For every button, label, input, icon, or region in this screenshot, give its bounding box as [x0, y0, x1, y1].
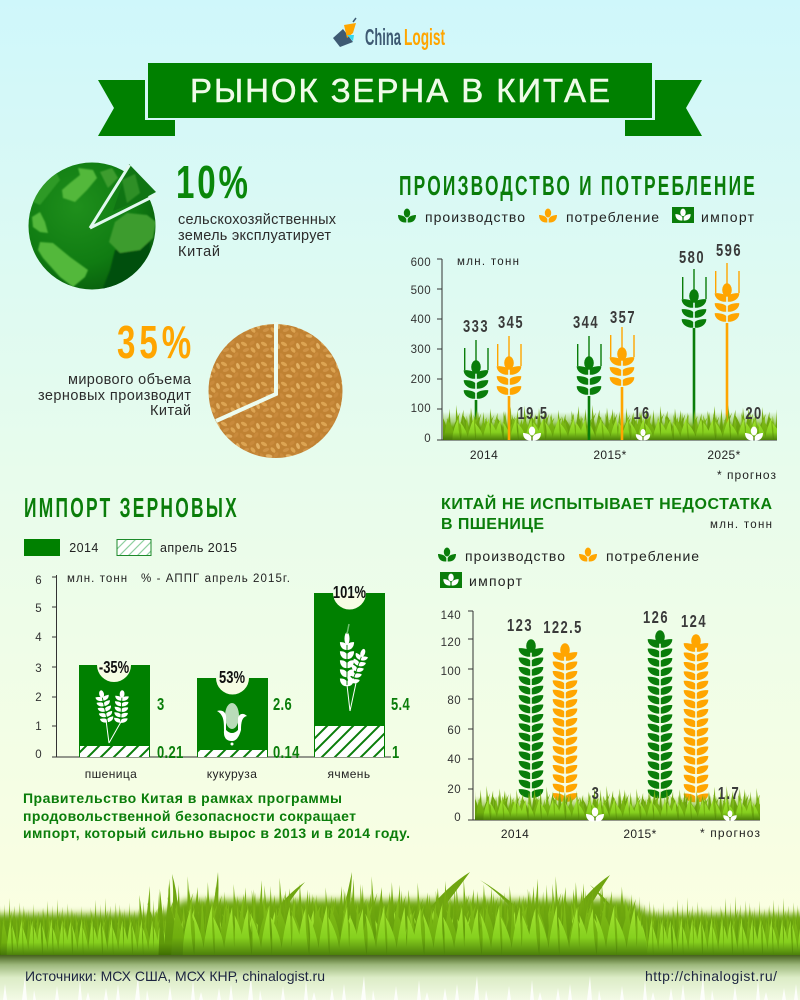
- text: 35% description: зерновых производит: [38, 388, 191, 404]
- import icons: [586, 808, 737, 822]
- chart 1 values: 344: [573, 313, 599, 333]
- text: 10% description: [178, 212, 337, 260]
- chart 1 axis: млн. тонн: [457, 256, 519, 268]
- wheat: 2015 consumption 124: [684, 634, 708, 802]
- chart 2 axis: 5: [35, 603, 42, 615]
- panel: 10% land: [28, 158, 337, 295]
- heading: China wheat: В ПШЕНИЦЕ: [441, 516, 544, 533]
- legend: production chart: [398, 207, 755, 225]
- icon: barley: [340, 624, 370, 711]
- chart 1 values: 580: [679, 248, 705, 268]
- chart 1 axis: 100: [411, 403, 431, 415]
- wheat: 2025 consumption 596: [715, 263, 740, 430]
- chart 1 x labels: 2025*: [707, 448, 741, 462]
- legend: production chart: производство: [425, 209, 525, 225]
- bar: barley: 1: [392, 743, 400, 763]
- chart 1 x labels: 2015*: [593, 448, 627, 462]
- chart 3 values: 122.5: [543, 618, 583, 638]
- logo: China Logist: Logist: [404, 24, 445, 50]
- chart 2 axis: млн. тонн % - АППГ апрель 2015г.: [67, 573, 290, 585]
- heading: China wheat: КИТАЙ НЕ ИСПЫТЫВАЕТ НЕДОСТАТКА: [441, 494, 772, 513]
- chart 3 x labels: * прогноз: [700, 826, 760, 840]
- chart 1 values: 16: [633, 404, 651, 424]
- legend: production chart: импорт: [701, 209, 755, 225]
- chart 3 x labels: 2014: [501, 827, 529, 841]
- text block: government note: Правительство Китая в рамках программы: [23, 790, 342, 806]
- unit label: млн. тонн: [710, 519, 772, 531]
- chart 1 axis: 200: [411, 374, 431, 386]
- legend: wheat chart: импорт: [469, 573, 523, 589]
- chart 1 values: 333: [463, 317, 489, 337]
- icon: corn: [217, 703, 247, 746]
- bar: barley: 101%: [333, 583, 366, 603]
- chart 3 values: 1.7: [718, 784, 740, 804]
- icon: wheat: [94, 689, 129, 743]
- title banner: РЫНОК ЗЕРНА В КИТАЕ: [190, 72, 610, 109]
- text block: government note: импорт, который сильно вырос в 2013 и в 2014 году.: [23, 825, 410, 841]
- legend: imports chart: [24, 539, 237, 556]
- chart 2 axis: [35, 573, 391, 761]
- chart 1 x labels: 2014: [470, 448, 498, 462]
- text block: government note: продовольственной безопасности сокращает: [23, 808, 356, 824]
- chart 1 values: 19.5: [518, 404, 548, 424]
- chart 3 x labels: 2015*: [623, 827, 657, 841]
- chart 2 axis: 2: [35, 692, 42, 704]
- chart 1 axis: 600: [411, 257, 431, 269]
- footer sources: Источники: МСХ США, МСХ КНР, chinalogist.ru: [25, 968, 325, 984]
- stat: 10%: 10%: [176, 158, 248, 208]
- icon: grain pie: [208, 322, 342, 458]
- chart: grain imports: [35, 573, 410, 781]
- chart 1 values: [463, 241, 763, 424]
- chart 1 grass: [434, 405, 796, 440]
- chart 1 axis: [411, 256, 777, 445]
- chart 3 x labels: [501, 826, 760, 841]
- chart 3 values: 126: [643, 608, 669, 628]
- logo: China Logist: China: [365, 24, 401, 50]
- text block: government note: [23, 790, 410, 841]
- text: 10% description: земель эксплуатирует: [178, 228, 331, 244]
- wheat: 2015 production 126: [648, 630, 672, 798]
- title banner: [98, 63, 702, 136]
- chart 1 axis: 400: [411, 314, 431, 326]
- wheat: 2014 consumption 122.5: [553, 643, 577, 802]
- heading: grain imports: ИМПОРТ ЗЕРНОВЫХ: [24, 492, 237, 523]
- text: 35% description: Китай: [150, 403, 191, 419]
- text: 35% description: [38, 372, 192, 419]
- wheat: 2014 production 333: [464, 340, 489, 430]
- chart 1 axis: 500: [411, 285, 431, 297]
- footer url: http://chinalogist.ru/: [645, 968, 777, 984]
- chart 2 axis: 0: [35, 749, 42, 761]
- chart: production and consumption: [411, 241, 796, 482]
- chart 3 values: [507, 608, 740, 804]
- chart 1 x labels: [470, 448, 776, 482]
- icon: green globe pie: [28, 162, 156, 295]
- bar: corn: 2.6: [273, 695, 292, 715]
- bar: barley: 5.4: [391, 695, 410, 715]
- wheat: 2025 production 580: [682, 269, 707, 430]
- chart 3 axis: 120: [441, 637, 461, 649]
- chart 2 axis: 6: [35, 575, 42, 587]
- bar: corn: 53%: [219, 668, 245, 688]
- bar: wheat: 3: [157, 695, 165, 715]
- chart 3 axis: 0: [454, 812, 461, 824]
- chart 3 values: 123: [507, 616, 533, 636]
- bar: wheat: [79, 658, 184, 781]
- chart 3 grass: [475, 786, 760, 820]
- chart 1 axis: 300: [411, 344, 431, 356]
- bar: wheat: пшеница: [85, 767, 137, 781]
- chart 1 axis: 0: [424, 433, 431, 445]
- chart 2 axis: 3: [35, 663, 42, 675]
- bar: corn: кукуруза: [207, 767, 257, 781]
- stat: 35%: 35%: [117, 318, 191, 368]
- wheat: 2014 production 123: [519, 639, 543, 798]
- chart 3 axis: 140: [441, 610, 461, 622]
- heading: China wheat: [441, 494, 772, 533]
- bar: barley: [314, 583, 410, 781]
- chart 2 axis: 1: [35, 721, 42, 733]
- bar: corn: [197, 668, 300, 781]
- legend: wheat chart: производство: [465, 548, 565, 564]
- panel: 35% grain: [38, 318, 342, 458]
- bar: wheat: 0.21: [157, 743, 184, 763]
- text: 10% description: Китай: [178, 244, 220, 260]
- bar: corn: 0.14: [273, 743, 300, 763]
- text: 10% description: сельскохозяйственных: [178, 212, 337, 228]
- legend: production chart: потребление: [566, 209, 659, 225]
- text: 35% description: мирового объема: [68, 372, 192, 388]
- chart 1 values: 357: [610, 308, 636, 328]
- chart 3 axis: [441, 610, 760, 824]
- chart 3 axis: 40: [447, 754, 461, 766]
- footer grass: [0, 872, 800, 1000]
- chart 2 axis: 4: [35, 632, 42, 644]
- bar: barley: ячмень: [328, 767, 370, 781]
- chart 3 values: 124: [681, 612, 707, 632]
- chart 3 values: 3: [592, 784, 600, 804]
- wheat: 2014 consumption 345: [497, 336, 522, 440]
- chart 3 axis: 80: [447, 695, 461, 707]
- chart 3 axis: 60: [447, 725, 461, 737]
- chart: wheat: [441, 608, 786, 841]
- chart 1 x labels: * прогноз: [717, 468, 776, 482]
- legend: wheat chart: потребление: [606, 548, 699, 564]
- heading: production and consumption: ПРОИЗВОДСТВО И ПОТРЕБЛЕНИЕ: [399, 170, 755, 201]
- chart 3 axis: 20: [447, 784, 461, 796]
- chart 1 values: 20: [745, 404, 763, 424]
- legend: wheat chart: [438, 548, 699, 589]
- bar: wheat: -35%: [99, 658, 129, 678]
- chart 1 values: 596: [716, 241, 742, 261]
- logo: China Logist: [333, 18, 445, 50]
- chart 1 values: 345: [498, 313, 524, 333]
- chart 3 axis: 100: [441, 666, 461, 678]
- wheat: 2015 consumption 357: [610, 327, 635, 440]
- legend: imports chart: апрель 2015: [160, 541, 237, 555]
- import icons: [523, 426, 763, 441]
- legend: imports chart: 2014: [69, 541, 99, 555]
- wheat: 2015 production 344: [577, 336, 602, 440]
